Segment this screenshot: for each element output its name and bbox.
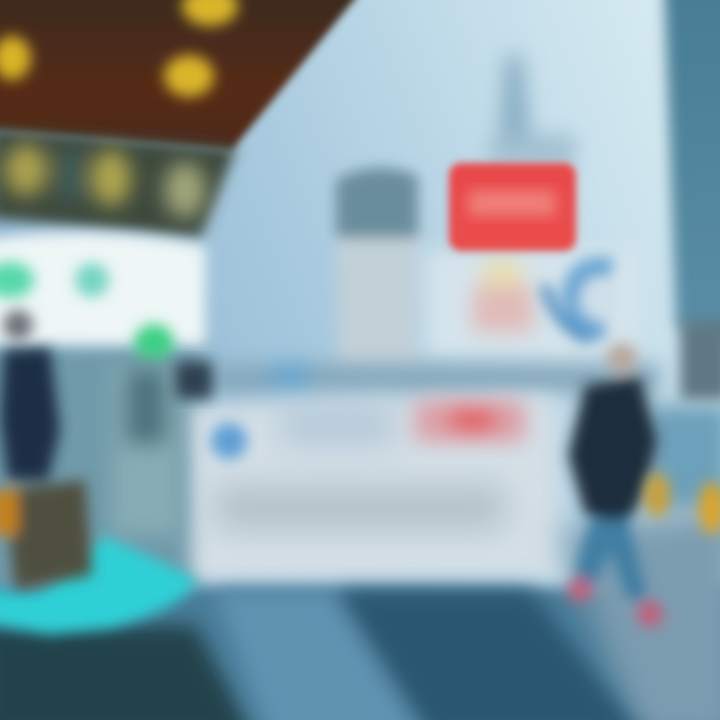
red billboard (449, 163, 576, 251)
person left (0, 310, 92, 590)
plaza texture (215, 405, 505, 530)
left mid ground (0, 345, 205, 595)
person right (568, 343, 663, 627)
ceiling canopy (0, 0, 362, 150)
frieze lights (4, 144, 206, 218)
pale plaza ground (188, 395, 560, 585)
pale buildings behind the sign (425, 250, 640, 360)
cyan glowing platform (0, 535, 198, 634)
red plaza sign (415, 400, 525, 442)
canopy lights (0, 0, 238, 97)
horizon street band (210, 362, 720, 510)
right tower building (664, 0, 720, 350)
right pavement (560, 505, 720, 720)
floor shadows and highlights (0, 590, 645, 720)
canopy lower frieze (0, 128, 236, 238)
green storefront marks (0, 262, 174, 362)
glass column (112, 365, 180, 535)
white glowing storefront (0, 232, 205, 345)
floor base (0, 588, 720, 720)
central grey building (336, 168, 418, 370)
billboard text glow (468, 190, 556, 216)
blue circular logo (545, 267, 620, 340)
right bollards (644, 320, 720, 534)
distant spire (490, 55, 575, 165)
blue plaza dot (211, 423, 247, 459)
dark bollard (176, 362, 212, 398)
